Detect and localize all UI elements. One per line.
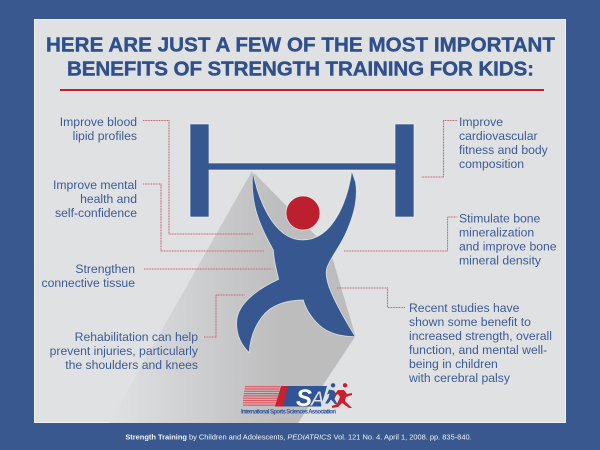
label: blood lipid: Improve blood xyxy=(60,115,137,129)
label: bone: Stimulate bone xyxy=(459,212,541,226)
icon: barbell xyxy=(190,124,414,217)
logo stripes xyxy=(243,387,280,405)
icon: lifter head xyxy=(286,196,320,230)
label: cerebral palsy: function, and mental well- xyxy=(409,343,547,357)
label: cerebral palsy: Recent studies have xyxy=(409,301,520,315)
label: cerebral palsy xyxy=(408,301,552,385)
label: cerebral palsy: being in children xyxy=(409,357,498,371)
label: mental health xyxy=(53,178,137,220)
label: cardiovascular: cardiovascular xyxy=(459,129,538,143)
label: blood lipid: lipid profiles xyxy=(73,129,137,143)
label: bone: mineral density xyxy=(459,254,542,268)
title rule xyxy=(60,89,544,91)
title xyxy=(46,34,555,80)
label: rehabilitation: prevent injuries, particularly xyxy=(50,344,199,358)
logo I xyxy=(275,386,291,406)
logo runner red xyxy=(332,383,352,408)
label: mental health: self-confidence xyxy=(55,206,137,220)
label: cardiovascular: composition xyxy=(459,157,524,171)
label: blood lipid xyxy=(60,115,137,143)
long shadow xyxy=(109,171,356,423)
citation footer: Strength Training by Children and Adolescents, PEDIATRICS Vol. 121 No. 4. April 1, 2008. pp. 835-840. xyxy=(125,432,472,442)
logo runner blue xyxy=(325,383,338,404)
label: rehabilitation: Rehabilitation can help xyxy=(75,330,198,344)
title: HERE ARE JUST A FEW OF THE MOST IMPORTANT xyxy=(46,34,555,56)
label: cardiovascular xyxy=(459,115,549,171)
label: connective tissue: Strengthen xyxy=(75,262,135,276)
label: cardiovascular: Improve xyxy=(459,115,503,129)
logo caption: International Sports Sciences Association xyxy=(241,410,336,416)
icon: lifter figure body xyxy=(237,171,356,353)
label: rehabilitation: the shoulders and knees xyxy=(65,358,198,372)
panel: main xyxy=(34,20,566,422)
label: bone: and improve bone xyxy=(459,240,557,254)
label: bone xyxy=(459,212,557,268)
logo A: A xyxy=(310,388,324,410)
label: connective tissue xyxy=(42,262,135,290)
title: BENEFITS OF STRENGTH TRAINING FOR KIDS: xyxy=(67,58,534,80)
leader lines xyxy=(143,120,458,337)
label: cerebral palsy: shown some benefit to xyxy=(409,315,531,329)
label: cerebral palsy: with cerebral palsy xyxy=(408,371,511,385)
label: mental health: health and xyxy=(80,192,137,206)
label: mental health: Improve mental xyxy=(53,178,137,192)
logo blue block xyxy=(283,386,327,406)
label: connective tissue: connective tissue xyxy=(42,276,135,290)
label: bone: mineralization xyxy=(459,226,534,240)
label: cerebral palsy: increased strength, overall xyxy=(409,329,552,343)
logo: ISSA xyxy=(241,383,352,416)
label: rehabilitation xyxy=(50,330,199,372)
logo S: S xyxy=(296,385,312,412)
label: cardiovascular: fitness and body xyxy=(459,143,549,157)
